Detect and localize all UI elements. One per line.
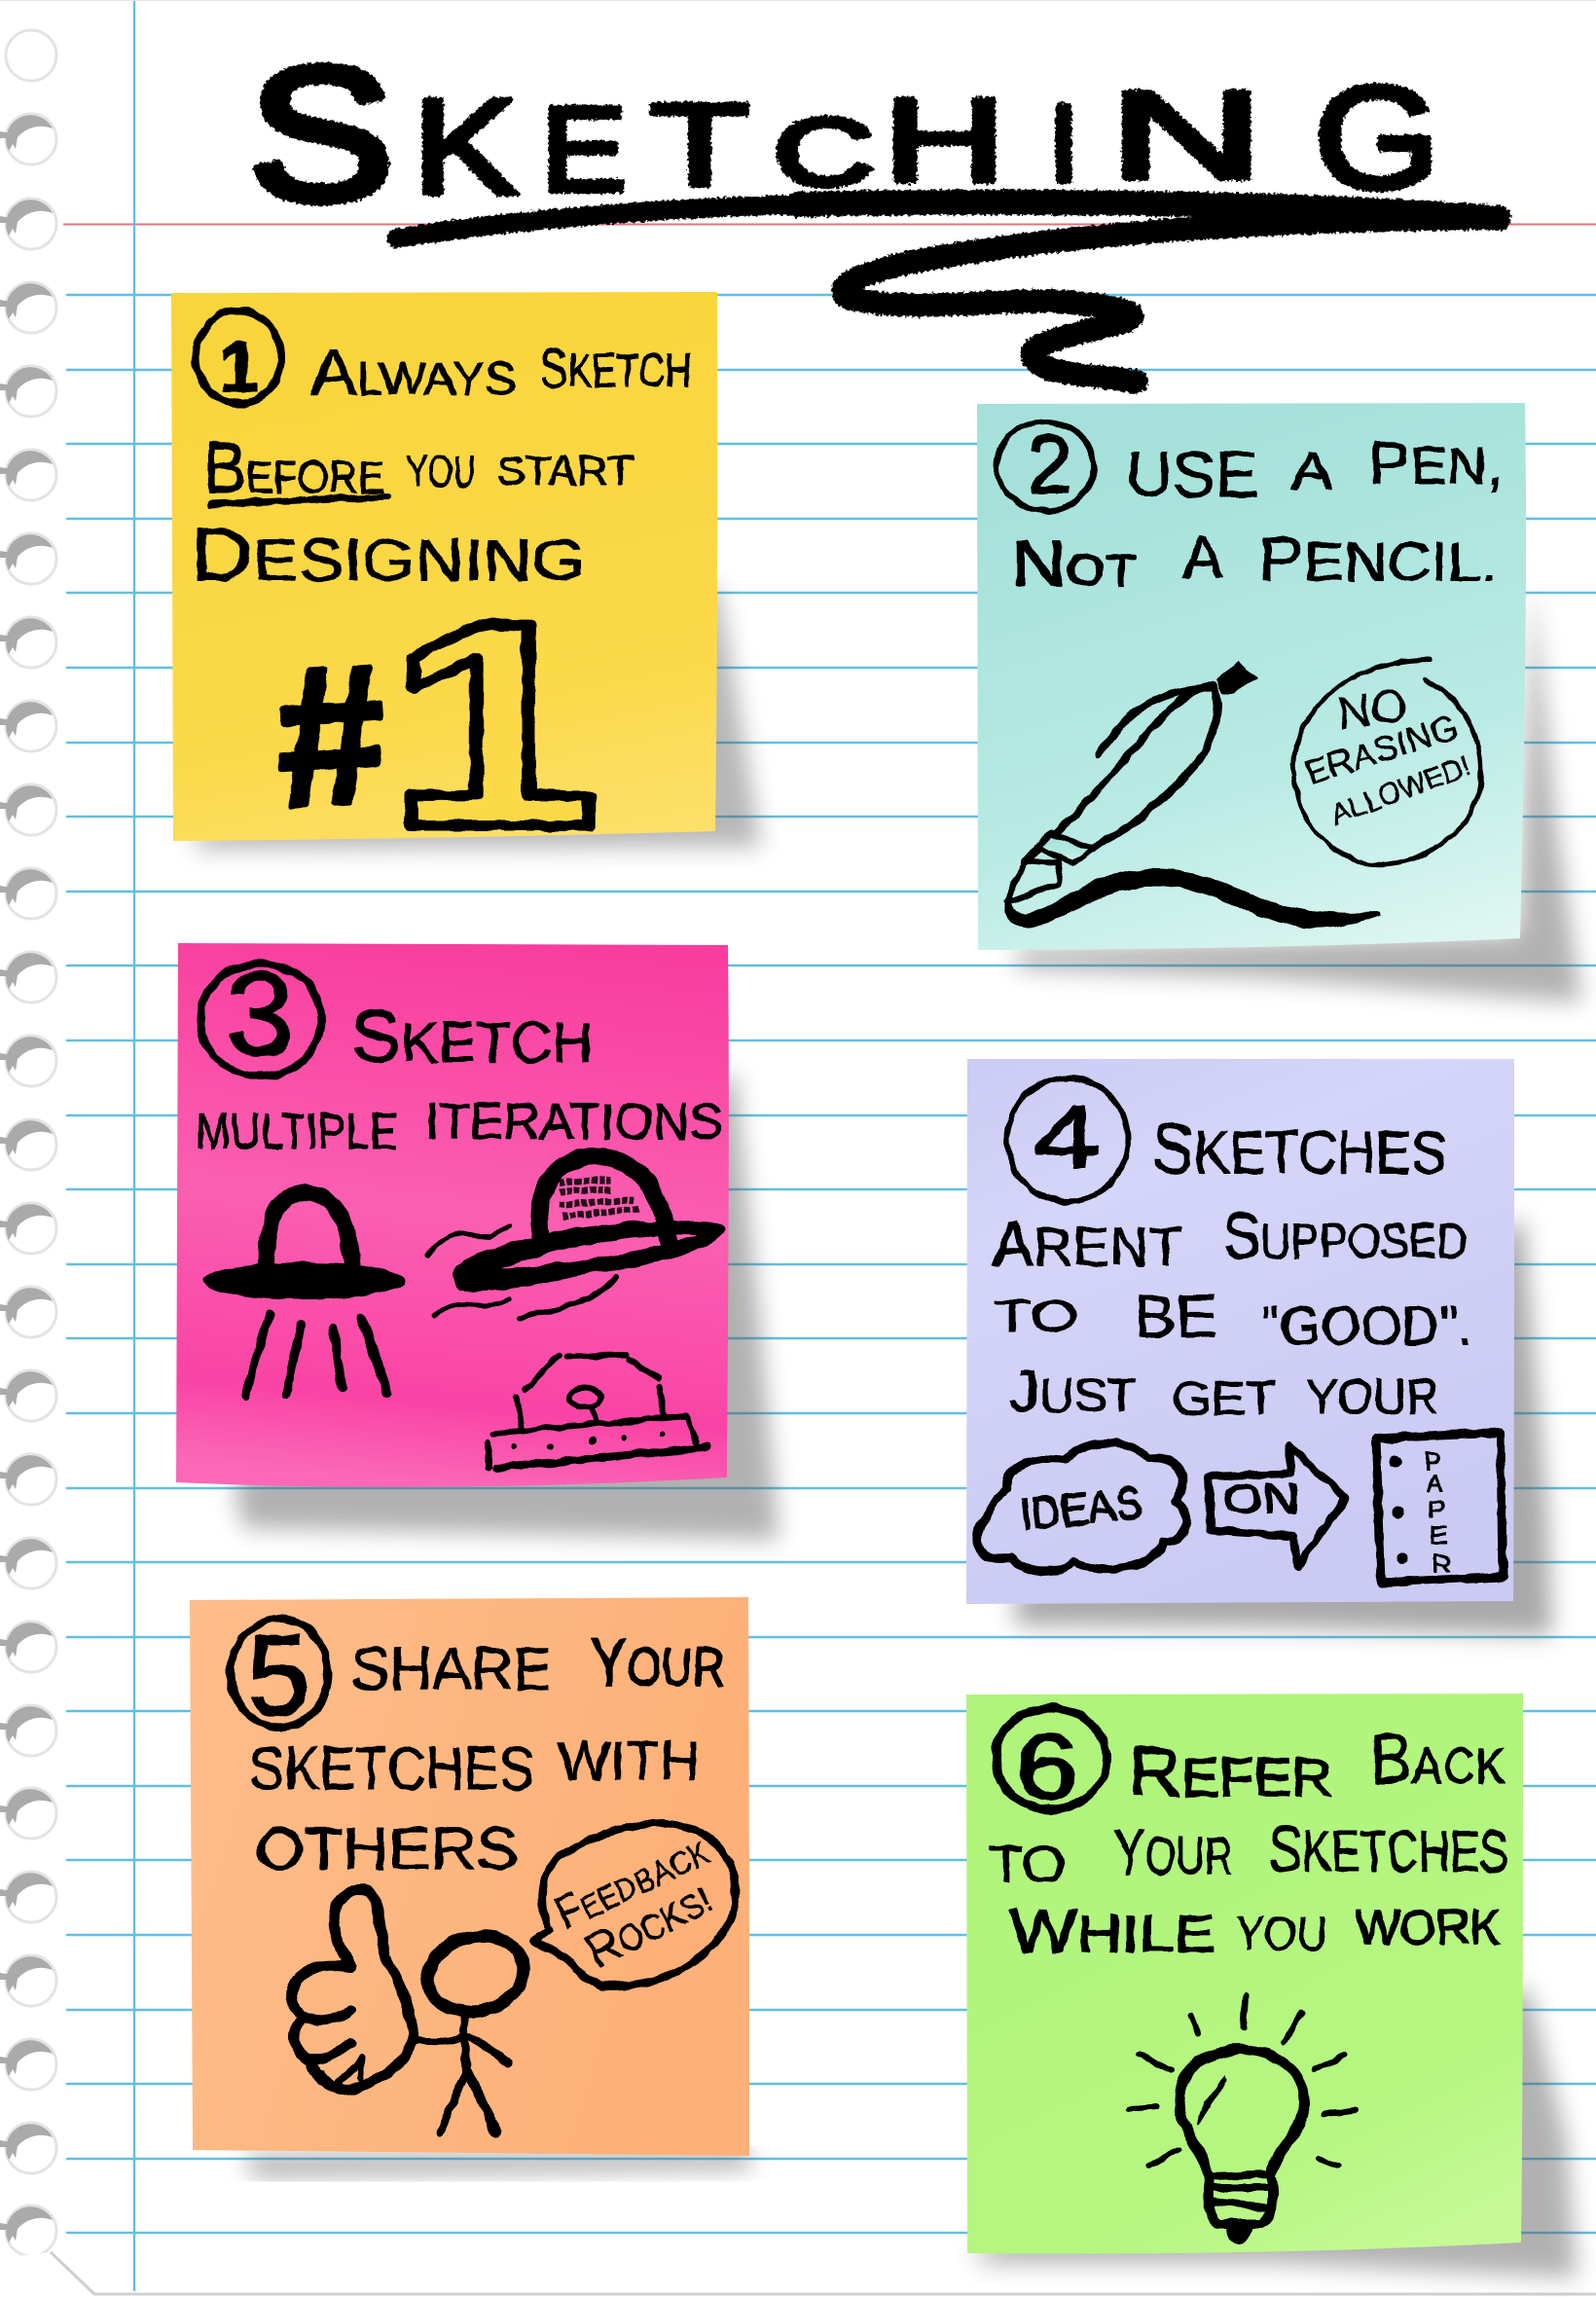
arrow: on bbox=[1208, 1445, 1345, 1567]
icon: ideas cloud: IDEAS bbox=[1018, 1477, 1144, 1540]
title: T bbox=[650, 80, 749, 210]
text: refer back to your sketches while you work: BACK bbox=[1370, 1721, 1505, 1799]
sticky note bbox=[190, 1597, 749, 2156]
callout: no erasing allowed: ALLOWED! bbox=[1326, 750, 1475, 831]
text: refer back to your sketches while you work bbox=[989, 1721, 1508, 1965]
note shadow bbox=[195, 584, 761, 849]
note shadow bbox=[1012, 1217, 1552, 1635]
number badge 3: 3 bbox=[226, 948, 294, 1080]
panel: tip 6 refer back to your sketches bbox=[966, 1694, 1577, 2278]
number badge 5 bbox=[231, 1612, 328, 1740]
title: E bbox=[541, 83, 627, 217]
title: C bbox=[774, 98, 874, 205]
text: use a pen not a pencil: PENCIL. bbox=[1258, 524, 1498, 594]
number badge 3 bbox=[200, 948, 321, 1080]
text: sketch multiple iterations: ITERATIONS bbox=[425, 1094, 723, 1150]
sticky note bbox=[171, 292, 717, 841]
text: always sketch before you start designing: BEFORE bbox=[203, 427, 384, 508]
panel: tip 3 sketch multiple iterations bbox=[176, 943, 779, 1540]
text: use a pen not a pencil bbox=[1011, 430, 1503, 599]
text: sketches arent supposed to be good just get your: GET bbox=[1172, 1373, 1277, 1425]
panel: tip 1 always sketch before designing bbox=[171, 292, 761, 888]
text: refer back to your sketches while you work: YOU bbox=[1236, 1909, 1327, 1960]
note shadow bbox=[234, 1071, 779, 1540]
icon: number one: 1 bbox=[387, 561, 599, 888]
text: share your sketches with others: SHARE bbox=[351, 1636, 552, 1703]
arrow: on: ON bbox=[1223, 1476, 1299, 1521]
text: use a pen not a pencil: A bbox=[1182, 525, 1223, 590]
text: always sketch before you start designing: DESIGNING bbox=[191, 514, 585, 597]
number badge 6 bbox=[996, 1708, 1106, 1819]
text: refer back to your sketches while you work: WHILE bbox=[1009, 1898, 1215, 1965]
text: sketch multiple iterations: MULTIPLE bbox=[196, 1104, 397, 1160]
text: refer back to your sketches while you work: REFER bbox=[1129, 1733, 1332, 1811]
icon: stick figure bbox=[415, 1925, 532, 2133]
callout: no erasing allowed: ERASING bbox=[1300, 707, 1463, 793]
text: always sketch before you start designing bbox=[191, 336, 692, 597]
icon: marker pen with stroke bbox=[1005, 661, 1380, 927]
number badge 6: 6 bbox=[1016, 1715, 1078, 1819]
panel: tip 4 sketches are not supposed to be good bbox=[966, 1059, 1552, 1635]
icon: light bulb bbox=[1129, 1995, 1356, 2243]
number badge 2: 2 bbox=[1028, 419, 1072, 510]
text: refer back to your sketches while you work: TO bbox=[989, 1836, 1066, 1894]
icon: boxy flying saucer bbox=[489, 1355, 707, 1468]
text: always sketch before you start designing: SKETCH bbox=[539, 337, 692, 398]
sticky note bbox=[966, 1694, 1523, 2254]
text: refer back to your sketches while you work: SKETCHES bbox=[1269, 1812, 1508, 1886]
number badge 1 bbox=[196, 310, 281, 407]
text: use a pen not a pencil: NOT bbox=[1011, 527, 1137, 599]
title bbox=[248, 28, 1440, 240]
text: sketch multiple iterations: SKETCH bbox=[351, 996, 593, 1078]
text: always sketch before you start designing: YOU bbox=[407, 446, 476, 496]
number badge 2 bbox=[997, 419, 1094, 511]
panel: tip 5 share your sketches with others bbox=[190, 1597, 751, 2176]
number badge 4: 4 bbox=[1034, 1089, 1100, 1186]
text: sketch multiple iterations bbox=[196, 996, 723, 1160]
title: K bbox=[413, 70, 518, 223]
callout: no erasing allowed bbox=[1293, 660, 1480, 864]
text: use a pen not a pencil: A bbox=[1291, 439, 1333, 500]
title: G bbox=[1314, 55, 1440, 219]
text: sketches arent supposed to be good just get your: "GOOD". bbox=[1261, 1294, 1472, 1356]
note shadow bbox=[973, 1986, 1577, 2278]
callout: feedback rocks: ROCKS! bbox=[578, 1870, 720, 1979]
text: always sketch before you start designing: ALWAYS bbox=[310, 336, 517, 408]
title: I bbox=[1048, 83, 1079, 204]
text: share your sketches with others bbox=[249, 1624, 725, 1881]
panel: tip 2 use a pen not a pencil bbox=[977, 403, 1581, 1003]
text: refer back to your sketches while you work: WORK bbox=[1356, 1900, 1501, 1954]
text: sketches arent supposed to be good just get your bbox=[992, 1108, 1472, 1425]
icon: flying saucer with beam bbox=[202, 1193, 405, 1396]
callout: feedback rocks bbox=[534, 1823, 736, 1986]
icon: sheet of paper: PAPER bbox=[1425, 1448, 1450, 1578]
number badge 1: 1 bbox=[220, 329, 259, 407]
icon: number one bbox=[269, 561, 599, 888]
number badge 5: 5 bbox=[247, 1612, 309, 1740]
icon: number one: # bbox=[269, 624, 392, 848]
text: share your sketches with others: YOUR bbox=[591, 1624, 725, 1700]
note shadow bbox=[243, 2151, 751, 2176]
number badge 4 bbox=[1007, 1077, 1128, 1202]
text: use a pen not a pencil: USE bbox=[1126, 438, 1258, 510]
callout: no erasing allowed: NO bbox=[1334, 679, 1410, 739]
text: refer back to your sketches while you work: YOUR bbox=[1113, 1815, 1233, 1887]
text: sketches arent supposed to be good just get your: TO bbox=[994, 1291, 1078, 1341]
text: share your sketches with others: SKETCHES bbox=[249, 1735, 534, 1803]
sticky note bbox=[966, 1059, 1514, 1604]
callout: feedback rocks: FEEDBACK bbox=[547, 1824, 716, 1940]
text: use a pen not a pencil: PEN, bbox=[1368, 430, 1503, 497]
text: share your sketches with others: OTHERS bbox=[255, 1816, 519, 1881]
text: always sketch before you start designing: START bbox=[496, 448, 634, 493]
sticky note bbox=[176, 943, 729, 1487]
text: share your sketches with others: WITH bbox=[558, 1730, 700, 1791]
text: sketches arent supposed to be good just get your: JUST bbox=[1009, 1359, 1137, 1424]
text: sketches arent supposed to be good just get your: BE bbox=[1134, 1284, 1217, 1349]
text: sketches arent supposed to be good just get your: SKETCHES bbox=[1151, 1108, 1447, 1188]
sticky note bbox=[977, 403, 1526, 950]
title: N bbox=[1109, 66, 1263, 205]
title: H bbox=[884, 74, 1005, 206]
text: sketches arent supposed to be good just get your: SUPPOSED bbox=[1223, 1199, 1468, 1271]
text: sketches arent supposed to be good just get your: ARENT bbox=[992, 1209, 1182, 1279]
text: sketches arent supposed to be good just get your: YOUR bbox=[1307, 1369, 1439, 1424]
marker underline squiggle bbox=[397, 202, 1499, 382]
icon: sheet of paper bbox=[1376, 1433, 1503, 1583]
icon: ideas cloud bbox=[977, 1443, 1186, 1572]
icon: flying saucer in motion bbox=[427, 1156, 725, 1318]
note shadow bbox=[1017, 584, 1581, 1003]
icon: thumbs up bbox=[292, 1889, 413, 2090]
title: S bbox=[248, 28, 394, 240]
